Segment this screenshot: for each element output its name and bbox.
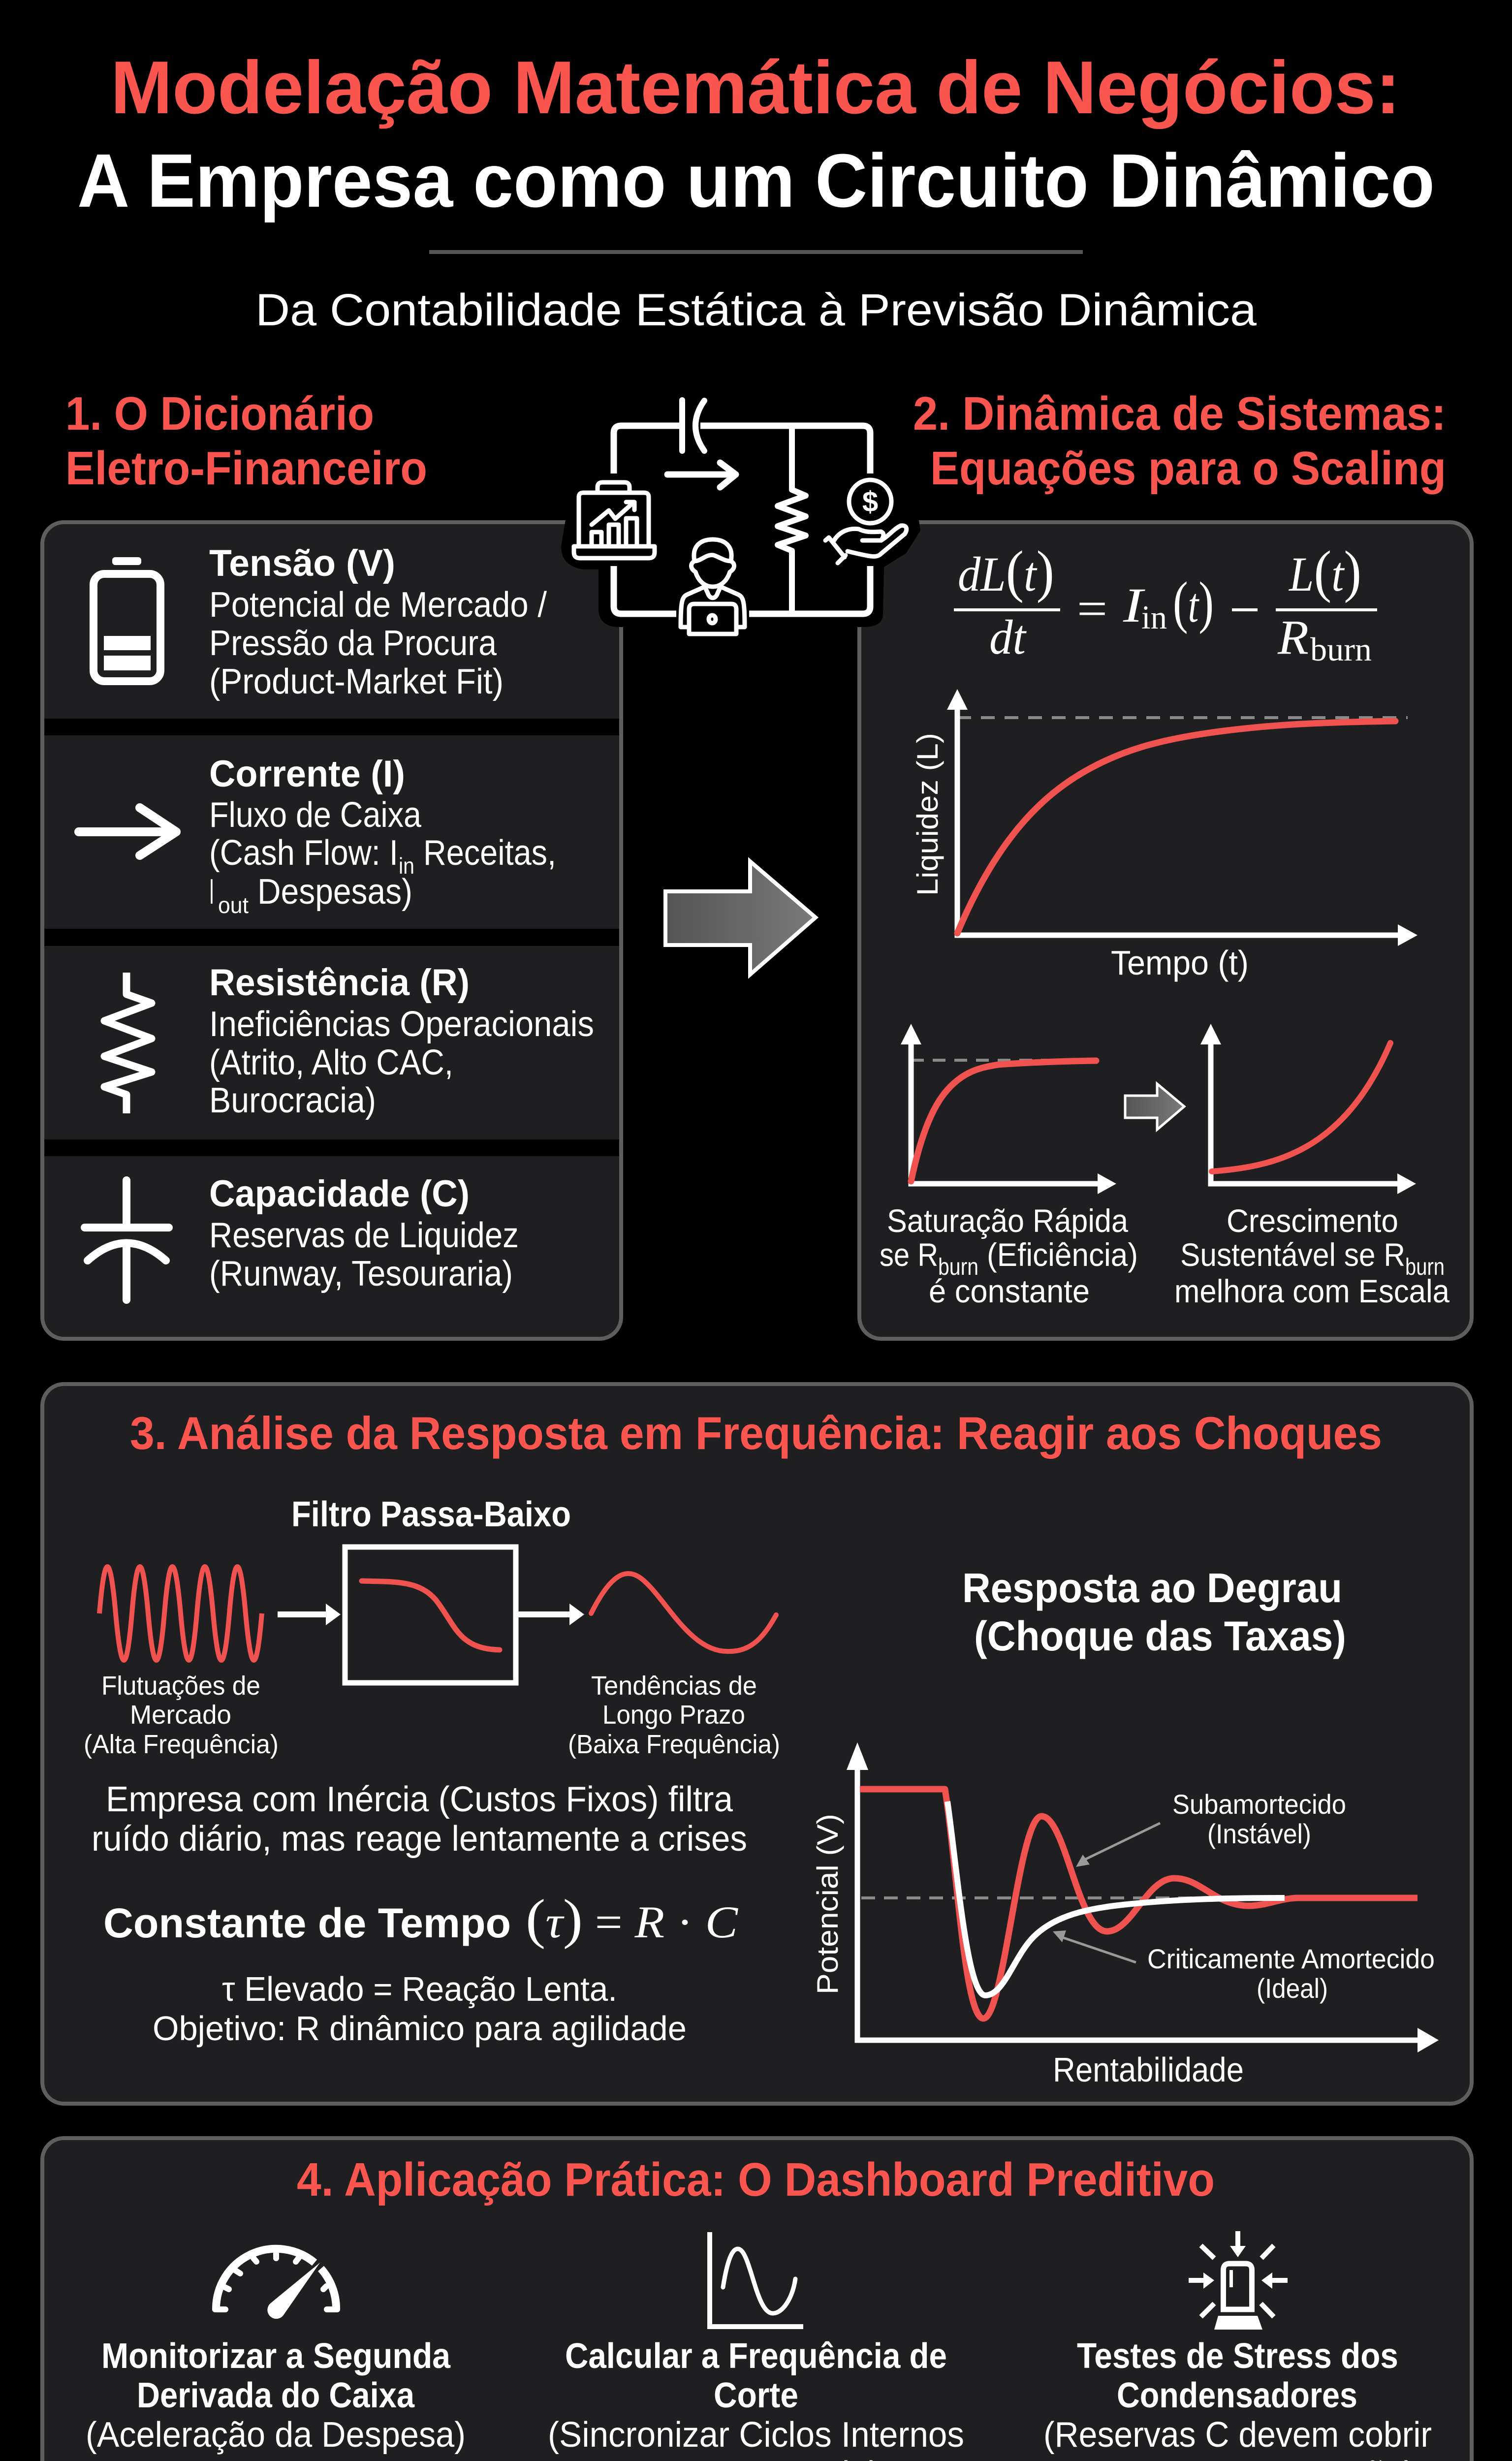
icon: frequency chart xyxy=(710,2232,803,2327)
text: second derivative: (Aceleração da Despesa) xyxy=(86,2415,466,2455)
caption: low frequency xyxy=(568,1671,780,1759)
text: stress tests: (Reservas C devem cobrir xyxy=(1043,2415,1432,2455)
panel: predictive dashboard xyxy=(42,2138,1472,2461)
caption: sustainable growth xyxy=(1174,1202,1449,1309)
formula: time constant xyxy=(103,1889,739,1950)
row: resistance xyxy=(104,962,594,1120)
caption: sustainable growth: burn xyxy=(1405,1254,1445,1280)
panel: frequency response xyxy=(42,1384,1472,2104)
heading: section 2 xyxy=(913,387,1446,495)
row: voltage xyxy=(94,542,547,701)
text: cutoff frequency: Corte xyxy=(714,2376,798,2415)
row: current: Receitas, xyxy=(423,833,556,873)
row: current: (Cash Flow: I xyxy=(209,833,398,873)
row: current xyxy=(79,753,556,918)
formula: liquidity differential equation: in xyxy=(1141,599,1167,636)
text: inertia explanation: Empresa com Inércia (Custos Fixos) filtra xyxy=(106,1780,733,1819)
chart: liquidity over time: Tempo (t) xyxy=(1111,944,1249,982)
caption: high frequency: Mercado xyxy=(130,1700,231,1730)
formula: time constant: Constante de Tempo xyxy=(103,1900,511,1946)
text: time constant note xyxy=(153,1970,687,2048)
arrow: between small charts xyxy=(1125,1084,1184,1130)
formula: liquidity differential equation: burn xyxy=(1310,631,1372,668)
icon: gauge xyxy=(215,2249,337,2319)
caption: sustainable growth: Sustentável se R xyxy=(1180,1236,1405,1273)
heading: step response: Resposta ao Degrau xyxy=(962,1565,1342,1611)
row: resistance: (Atrito, Alto CAC, xyxy=(209,1043,453,1082)
heading: section 2: 2. Dinâmica de Sistemas: xyxy=(913,387,1446,440)
row: resistance: Resistência (R) xyxy=(209,962,470,1004)
text: cutoff frequency xyxy=(548,2336,964,2461)
heading: section 3: 3. Análise da Resposta em Frequência: Reagir aos Choques xyxy=(130,1407,1382,1459)
heading: section 1 xyxy=(65,387,427,495)
icon: battery xyxy=(94,557,160,681)
row: current: out xyxy=(218,892,249,918)
caption: low frequency: Longo Prazo xyxy=(602,1700,745,1730)
caption: sustainable growth: Crescimento xyxy=(1227,1202,1398,1239)
caption: rapid saturation: é constante xyxy=(929,1273,1090,1309)
formula: liquidity differential equation: dt xyxy=(989,610,1027,664)
callout: critically damped xyxy=(1053,1930,1435,2004)
formula: liquidity differential equation: dL(t) xyxy=(958,539,1054,603)
chart: low-frequency output wave xyxy=(591,1574,776,1651)
text: cutoff frequency: Calcular a Frequência de xyxy=(565,2336,947,2376)
chart: step response: Potencial (V) xyxy=(811,1814,844,1994)
callout: critically damped: (Ideal) xyxy=(1257,1973,1328,2004)
title: Modelação Matemática de Negócios: xyxy=(111,46,1400,129)
caption: rapid saturation: burn xyxy=(938,1254,978,1280)
row: current: Corrente (I) xyxy=(209,753,405,795)
caption: high frequency: Flutuações de xyxy=(101,1671,260,1701)
arrow: filter to output xyxy=(518,1604,584,1625)
heading: step response xyxy=(962,1565,1346,1659)
row: voltage: Pressão da Procura xyxy=(209,624,497,663)
text: stress tests: Condensadores xyxy=(1117,2376,1357,2415)
row: current: Despesas) xyxy=(257,872,412,912)
formula: liquidity differential equation: R xyxy=(1277,610,1309,664)
row: current: Fluxo de Caixa xyxy=(209,795,422,835)
row: capacitance: (Runway, Tesouraria) xyxy=(209,1254,513,1294)
arrow: from dictionary to dynamics xyxy=(665,861,816,975)
formula: liquidity differential equation: (t) xyxy=(1173,570,1214,634)
central circuit illustration xyxy=(561,400,920,640)
icon: stress alarm xyxy=(1189,2231,1288,2330)
chart: step response xyxy=(811,1742,1439,2089)
text: second derivative: Monitorizar a Segunda xyxy=(101,2336,451,2376)
chart: liquidity over time xyxy=(911,689,1418,982)
caption: high frequency: (Alta Frequência) xyxy=(84,1730,279,1759)
formula: liquidity differential equation xyxy=(954,539,1377,668)
caption: low frequency: (Baixa Frequência) xyxy=(568,1730,780,1759)
formula: liquidity differential equation: = xyxy=(1077,581,1107,636)
icon: filter box xyxy=(345,1547,516,1683)
formula: liquidity differential equation: I xyxy=(1123,578,1146,632)
row: capacitance xyxy=(85,1173,519,1300)
icon: briefcase with growth chart xyxy=(574,482,655,558)
label: low-pass filter: Filtro Passa-Baixo xyxy=(291,1495,571,1534)
subtitle: Da Contabilidade Estática à Previsão Dinâmica xyxy=(255,285,1257,335)
icon: resistor xyxy=(104,973,152,1113)
callout: underdamped: Subamortecido xyxy=(1172,1789,1346,1820)
chart: liquidity over time: Liquidez (L) xyxy=(911,733,944,896)
caption: rapid saturation xyxy=(880,1202,1138,1309)
panel: system dynamics background xyxy=(859,522,1472,1339)
caption: rapid saturation: se R xyxy=(880,1236,938,1273)
chart: step response: Rentabilidade xyxy=(1053,2051,1244,2089)
row: voltage: Potencial de Mercado / xyxy=(209,585,547,625)
row: resistance: Ineficiências Operacionais xyxy=(209,1005,594,1044)
row: resistance: Burocracia) xyxy=(209,1081,376,1120)
caption: low frequency: Tendências de xyxy=(591,1671,757,1701)
text: time constant note: τ Elevado = Reação Lenta. xyxy=(222,1970,617,2008)
icon label: dollar sign: $ xyxy=(862,486,878,518)
panel: dictionary background xyxy=(42,522,621,1339)
caption: rapid saturation: Saturação Rápida xyxy=(887,1202,1128,1239)
row: voltage: (Product-Market Fit) xyxy=(209,662,504,701)
text: second derivative: Derivada do Caixa xyxy=(137,2376,415,2415)
row: capacitance: Capacidade (C) xyxy=(209,1173,470,1215)
heading: section 4: 4. Aplicação Prática: O Dashboard Preditivo xyxy=(297,2153,1215,2206)
caption: sustainable growth: melhora com Escala xyxy=(1174,1273,1449,1309)
callout: critically damped: Criticamente Amortecido xyxy=(1147,1943,1435,1974)
chart: sustainable growth xyxy=(1200,1024,1416,1194)
heading: step response: (Choque das Taxas) xyxy=(974,1613,1346,1659)
icon: capacitor xyxy=(85,1180,169,1300)
text: second derivative xyxy=(86,2336,466,2455)
heading: section 1: 1. O Dicionário xyxy=(65,387,374,440)
icon: person with laptop xyxy=(681,539,745,634)
formula: time constant: (τ) = R · C xyxy=(526,1889,739,1950)
arrow: input to filter xyxy=(278,1604,341,1625)
text: stress tests xyxy=(1043,2336,1432,2461)
chart: high-frequency input wave xyxy=(99,1567,262,1660)
heading: section 2: Equações para o Scaling xyxy=(930,442,1446,495)
title xyxy=(77,46,1435,223)
text: stress tests: Testes de Stress dos xyxy=(1077,2336,1398,2376)
caption: rapid saturation: (Eficiência) xyxy=(987,1236,1138,1273)
row: capacitance: Reservas de Liquidez xyxy=(209,1216,519,1255)
caption: high frequency xyxy=(84,1671,279,1759)
text: inertia explanation: ruído diário, mas reage lentamente a crises xyxy=(92,1819,747,1859)
title: A Empresa como um Circuito Dinâmico xyxy=(77,138,1435,223)
text: cutoff frequency: (Sincronizar Ciclos Internos xyxy=(548,2415,964,2455)
chart: rapid saturation xyxy=(901,1024,1116,1194)
callout: underdamped: (Instável) xyxy=(1207,1818,1311,1849)
icon: hand holding coin xyxy=(825,480,907,563)
icon: arrow xyxy=(79,808,176,855)
text: time constant note: Objetivo: R dinâmico para agilidade xyxy=(153,2009,687,2048)
text: inertia explanation xyxy=(92,1780,747,1859)
callout: underdamped xyxy=(1076,1789,1346,1867)
row: voltage: Tensão (V) xyxy=(209,542,395,584)
row: current: in xyxy=(399,853,414,879)
row: current: I xyxy=(209,872,214,912)
formula: liquidity differential equation: L(t) xyxy=(1288,539,1361,603)
heading: section 1: Eletro-Financeiro xyxy=(65,442,427,495)
